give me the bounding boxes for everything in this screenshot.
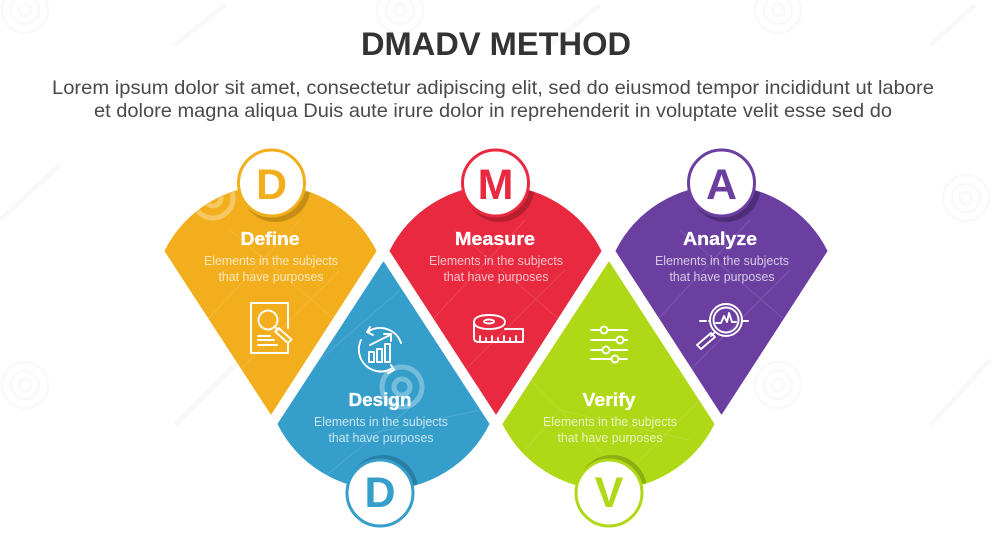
text: Design: that have purposes <box>328 431 434 445</box>
text: Analyze: that have purposes <box>670 270 774 284</box>
watermark spirals <box>0 0 990 425</box>
icon: magnifier with pulse <box>697 304 748 349</box>
text: Define: that have purposes <box>218 270 324 284</box>
text: Design <box>314 415 448 445</box>
text: Measure <box>429 254 563 284</box>
icon: document search <box>251 303 292 353</box>
watermark spiral: Define <box>196 192 236 220</box>
subtitle: Lorem ipsum dolor sit amet, consectetur adipiscing elit, sed do eiusmod tempor incididunt ut labore <box>52 77 934 99</box>
heading: Design: Design <box>348 390 412 410</box>
text: Measure: Elements in the subjects <box>429 254 563 268</box>
icon: measuring tape <box>474 315 523 342</box>
text: Verify: Elements in the subjects <box>543 415 677 429</box>
watermark spiral: Design <box>382 367 422 407</box>
text: Design: Elements in the subjects <box>314 415 448 429</box>
text: Verify <box>543 415 677 445</box>
panel: Measure <box>390 150 601 414</box>
panel: Define <box>165 150 376 414</box>
heading: Measure: Measure <box>455 229 535 249</box>
icon: sliders <box>591 326 627 362</box>
circle shadow: Verify <box>584 455 646 484</box>
letter badge: Verify: V <box>595 469 624 517</box>
text: Define <box>204 254 338 284</box>
text: Verify: that have purposes <box>558 431 662 445</box>
panel: Analyze <box>616 150 827 414</box>
panel: Design <box>278 262 489 526</box>
subtitle: et dolore magna aliqua Duis aute irure dolor in reprehenderit in voluptate velit esse sed do <box>94 100 892 122</box>
letter badge: Verify <box>576 460 642 526</box>
letter badge: Design: D <box>364 469 396 517</box>
subtitle <box>52 77 934 122</box>
circle shadow: Measure <box>471 191 534 222</box>
letter badge: Define <box>238 150 304 216</box>
letter badge: Define: D <box>256 161 287 209</box>
icon: growth chart cycle <box>359 327 401 373</box>
title: DMADV METHOD <box>361 26 631 62</box>
letter badge: Analyze: A <box>706 161 737 209</box>
letter badge: Design <box>347 460 413 526</box>
circle shadow: Define <box>247 191 310 222</box>
text: Define: Elements in the subjects <box>204 254 338 268</box>
text: Analyze <box>655 254 789 284</box>
text: Analyze: Elements in the subjects <box>655 254 789 268</box>
letter badge: Measure <box>462 150 528 216</box>
panel: Verify <box>503 262 714 526</box>
heading: Analyze: Analyze <box>683 229 757 249</box>
heading: Verify: Verify <box>582 390 636 410</box>
letter badge: Measure: M <box>478 161 513 209</box>
text: Measure: that have purposes <box>444 270 548 284</box>
circle shadow: Design <box>354 455 418 485</box>
heading: Define: Define <box>240 229 300 249</box>
letter badge: Analyze <box>688 150 754 216</box>
circle shadow: Analyze <box>697 190 760 222</box>
